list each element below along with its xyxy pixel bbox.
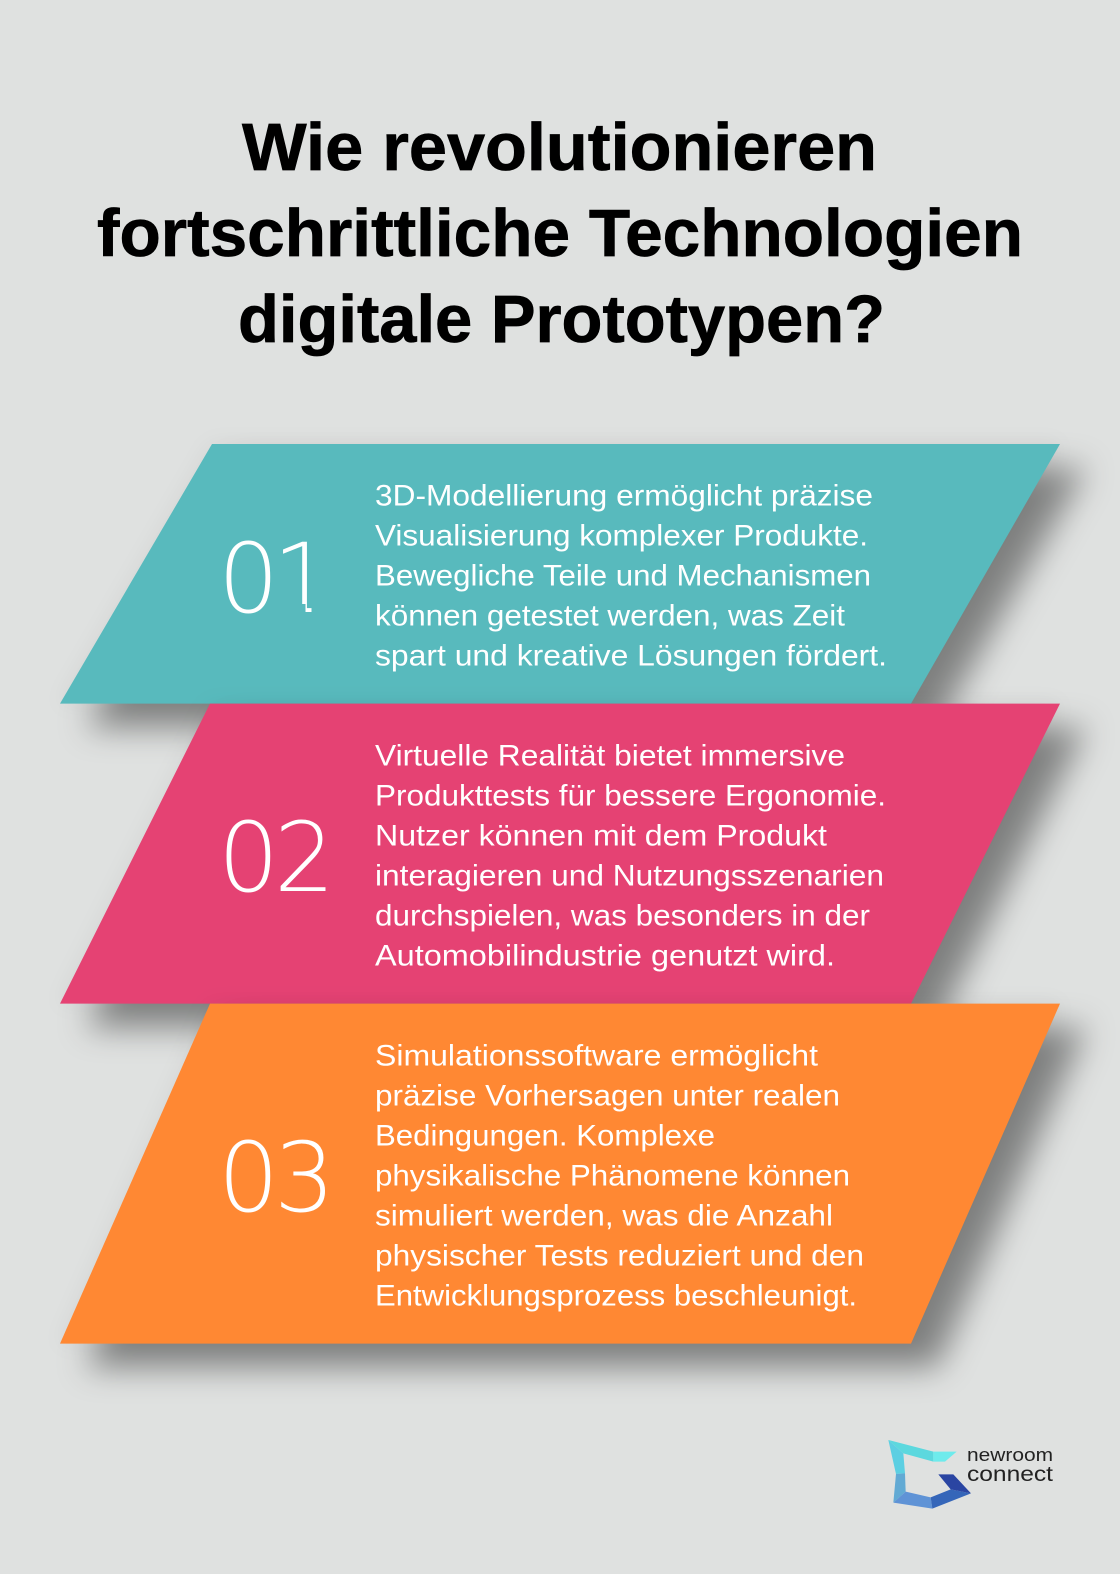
text block 03: physikalische Phänomene können — [375, 1160, 850, 1192]
title: Wie revolutionieren — [242, 110, 877, 185]
text block 02: Automobilindustrie genutzt wird. — [375, 940, 835, 972]
text block 02 — [375, 740, 886, 972]
panel: step 02 — [60, 704, 1086, 1028]
number 02: 02 — [218, 802, 335, 914]
text block 03: präzise Vorhersagen unter realen — [375, 1080, 840, 1112]
logo wordmark: connect — [967, 1463, 1053, 1486]
text block 02: Produkttests für bessere Ergonomie. — [375, 780, 886, 812]
text block 01: 3D-Modellierung ermöglicht präzise — [375, 480, 873, 512]
text block 03: Entwicklungsprozess beschleunigt. — [375, 1280, 857, 1312]
logo wordmark — [967, 1445, 1053, 1486]
text block 02: interagieren und Nutzungsszenarien — [375, 860, 884, 892]
text block 03 — [375, 1040, 864, 1312]
text block 02: Nutzer können mit dem Produkt — [375, 820, 828, 852]
text block 03: physischer Tests reduziert und den — [375, 1240, 864, 1272]
orange parallelogram — [60, 1004, 1060, 1344]
logo: newroom connect — [888, 1440, 1053, 1509]
icon: logo mark — [888, 1440, 971, 1509]
text block 03: simuliert werden, was die Anzahl — [375, 1200, 833, 1232]
teal parallelogram — [60, 444, 1060, 704]
panel: step 01 — [60, 444, 1086, 728]
text block 02: durchspielen, was besonders in der — [375, 900, 870, 932]
number 01: 01 — [218, 523, 334, 635]
number 03: 03 — [218, 1122, 335, 1234]
panel: step 03 — [60, 1004, 1086, 1368]
text block 03: Bedingungen. Komplexe — [375, 1120, 715, 1152]
text block 01 — [375, 480, 887, 672]
text block 01: Bewegliche Teile und Mechanismen — [375, 560, 871, 592]
text block 03: Simulationssoftware ermöglicht — [375, 1040, 819, 1072]
title: digitale Prototypen? — [238, 282, 885, 357]
text block 01: spart und kreative Lösungen fördert. — [375, 640, 887, 672]
text block 02: Virtuelle Realität bietet immersive — [375, 740, 845, 772]
logo wordmark: newroom — [967, 1445, 1053, 1465]
pink parallelogram — [60, 704, 1060, 1004]
title: fortschrittliche Technologien — [97, 196, 1023, 271]
text block 01: können getestet werden, was Zeit — [375, 600, 846, 632]
title — [97, 110, 1023, 357]
text block 01: Visualisierung komplexer Produkte. — [375, 520, 868, 552]
